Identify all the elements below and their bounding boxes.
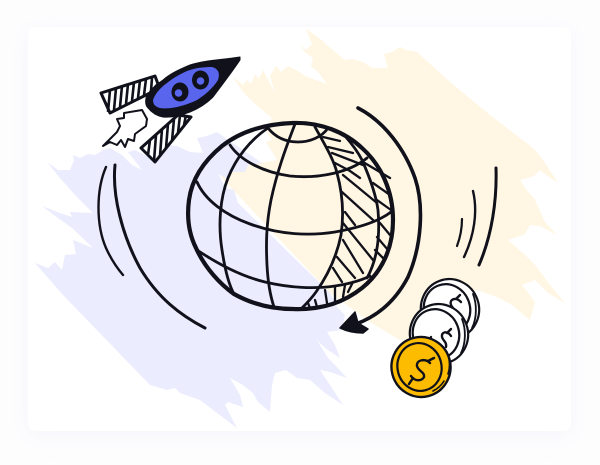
- coins: [385, 271, 488, 404]
- motion arc: left outer: [114, 165, 205, 328]
- arrow: orbit arc: [340, 108, 420, 333]
- motion arcs: right: [457, 168, 496, 265]
- globe meridians: [220, 124, 379, 308]
- icon: rocket blue hull: [153, 67, 219, 108]
- icon: rocket windows: [172, 70, 209, 102]
- icon: rocket body: [146, 57, 240, 117]
- icon: gold coin: [385, 330, 457, 404]
- icon: middle silver coin: [401, 296, 477, 372]
- brush stroke: yellow: [221, 29, 565, 345]
- globe hatching: [308, 137, 391, 308]
- icon: rocket flame: [103, 110, 147, 147]
- rocket: [101, 57, 240, 162]
- card panel: [28, 27, 571, 431]
- globe outline: [188, 123, 393, 309]
- globe: [188, 123, 393, 309]
- icon: back silver coin: [412, 271, 488, 347]
- arrowhead: [340, 312, 368, 333]
- icon: rocket upper fin: [101, 76, 158, 113]
- card shadow: [28, 32, 571, 434]
- icon: rocket lower fin: [141, 115, 191, 162]
- motion arc: left inner: [98, 167, 123, 275]
- brush stroke: lavender: [35, 132, 347, 428]
- globe parallels: [197, 128, 391, 288]
